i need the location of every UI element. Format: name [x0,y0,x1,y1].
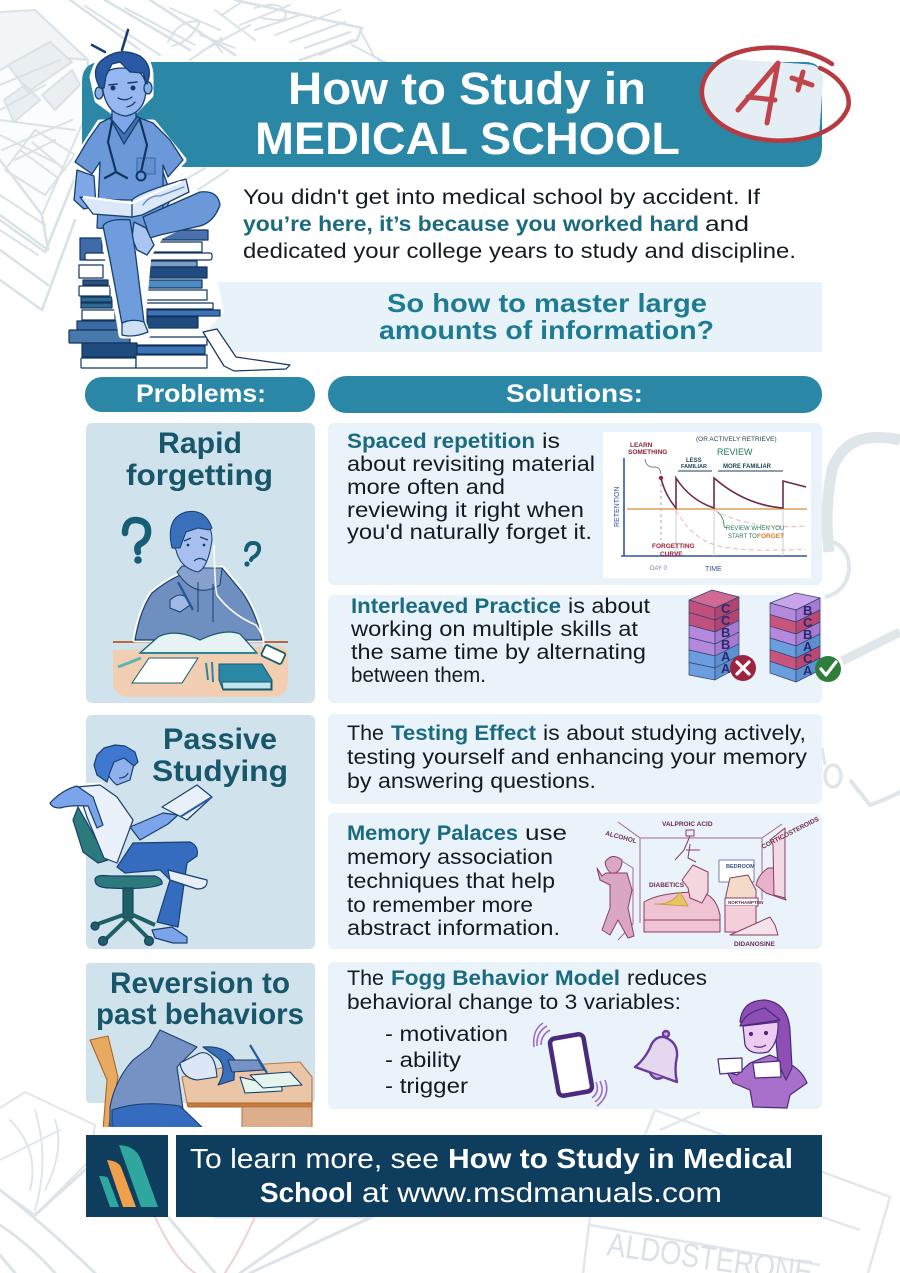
panel: interleaved practice: working on multiple skills at [350,618,638,641]
icon: bell [635,1031,677,1082]
panel: interleaved practice: between them. [351,664,486,687]
panel: spaced repetition: reviewing it right when [347,499,584,522]
panel: passive studying: Studying [152,755,288,788]
icon: block stack, blocked practice (wrong): B [721,625,730,640]
icon: block stack, blocked practice (wrong): A [721,661,731,676]
panel: reversion to past behaviors: Reversion to [110,967,290,1000]
intro text: and [705,213,749,236]
icon: block stack, blocked practice (wrong): A [721,649,731,664]
icon: correct mark [815,656,841,682]
chart: forgetting curve and review schedule: RETENTION [614,487,621,527]
list: three variables: - trigger [385,1075,468,1098]
panel: testing effect: Testing Effect [391,722,536,745]
title banner: MEDICAL SCHOOL [255,113,680,164]
icon: block stack, interleaved practice (right) [770,593,820,682]
footer call to action: at www.msdmanuals.com [362,1177,722,1208]
illustration: girl with flash cards [718,1000,807,1108]
illustration: memory palace bedroom: DIABETICS [649,882,685,889]
panel: reversion to past behaviors: past behaviors [96,998,304,1031]
icon: wrong mark [730,655,756,681]
chart: forgetting curve and review schedule: DAY 0 [650,566,667,572]
chart: forgetting curve and review schedule: LESS [686,458,702,464]
background sketch: Aldosterone flash card [583,1110,890,1273]
scrub top [75,118,183,232]
panel: interleaved practice [328,590,841,703]
panel: interleaved practice: Interleaved Practice [351,595,561,618]
illustration: memory palace bedroom: ALCOHOL [604,830,637,845]
background sketch: open textbook top left [0,0,400,310]
chart: forgetting curve and review schedule: FORGETTING [652,543,695,550]
chart: forgetting curve and review schedule: CURVE [660,551,683,558]
chart: forgetting curve and review schedule: FORGET [757,533,784,540]
panel: passive studying [50,715,315,949]
section pills: Solutions: [506,380,643,408]
white sticker outline [75,50,222,335]
title banner: How to Study in [288,63,646,114]
icon: question marks [125,520,259,567]
chart: forgetting curve and review schedule: REVIEW WHEN YOU [726,526,784,532]
icon: block stack, interleaved practice (right): A [803,663,813,678]
chart: forgetting curve and review schedule: START TO [728,534,757,540]
illustration: relaxed student reading in chair [50,745,212,946]
intro text: dedicated your college years to study and discipline. [243,240,796,263]
list: three variables: - motivation [385,1023,508,1046]
panel: rapid forgetting: Rapid [158,427,242,460]
illustration: memory palace bedroom: BEDROOM [726,864,755,870]
crossed leg [143,192,220,238]
section pills: Problems: [136,380,266,408]
icon: block stack, blocked practice (wrong): C [721,613,731,628]
icon: block stack, interleaved practice (right): A [803,639,813,654]
icon: vibrating phone [534,1023,607,1106]
footer logo [86,1135,168,1217]
chart: forgetting curve and review schedule: TIME [705,566,722,573]
panel: spaced repetition: you'd naturally forget it. [347,521,592,544]
panel: spaced repetition: more often and [347,476,505,499]
list: three variables [385,1023,508,1098]
book stack [66,226,296,374]
loose open book [203,329,290,371]
intro text: you’re here, it’s because you worked hard [243,213,699,236]
chart: forgetting curve and review schedule: LEARN [630,442,653,449]
footer call to action [176,1135,822,1217]
panel: memory palaces [328,813,822,949]
illustration: memory palace bedroom: DIDANOSINE [734,941,775,948]
chart: forgetting curve and review schedule: (OR ACTIVELY RETRIEVE) [696,436,777,443]
textbook [80,179,189,217]
panel: testing effect: The [347,722,384,745]
icon: block stack, blocked practice (wrong): C [721,601,731,616]
intro text: You didn't get into medical school by accident. If [243,186,760,209]
panel: memory palaces: memory association [347,846,553,869]
neck and face [112,105,136,134]
panel: interleaved practice: the same time by alternating [351,641,646,664]
panel: memory palaces: to remember more [347,894,533,917]
panel: rapid forgetting [86,423,315,703]
panel: memory palaces: techniques that help [347,870,555,893]
section pills [85,376,822,413]
list: three variables: - ability [385,1049,462,1072]
illustration: memory palace bedroom: CORTICOSTEROIDS [761,816,821,851]
chart: forgetting curve and review schedule: SOMETHING [628,449,667,456]
panel: interleaved practice: is about [568,595,650,618]
chart: forgetting curve and review schedule: MORE FAMILIAR [723,464,772,470]
panel: rapid forgetting: forgetting [126,459,273,492]
hanging leg [103,220,144,324]
question band: amounts of information? [379,315,714,345]
footer call to action: School [260,1177,353,1208]
footer call to action: To learn more, see [190,1143,439,1174]
panel: memory palaces: Memory Palaces [347,822,518,845]
panel: fogg behavior model: behavioral change to 3 variables: [347,991,681,1014]
panel: testing effect: is about studying actively, [543,722,806,745]
panel: memory palaces: abstract information. [347,917,560,940]
question band: So how to master large [387,288,707,318]
stethoscope [105,120,147,178]
panel: spaced repetition: Spaced repetition [347,430,535,453]
illustration: memory palace bedroom [597,816,821,948]
footer call to action: How to Study in Medical [448,1143,793,1174]
arms [74,170,96,209]
illustration: memory palace bedroom: VALPROIC ACID [662,821,713,828]
title banner [82,62,822,167]
chart: forgetting curve and review schedule [603,432,811,578]
panel: spaced repetition [328,423,822,585]
icon: block stack, interleaved practice (right): B [803,603,812,618]
character: medical student [74,30,222,336]
illustration: memory palace bedroom: NORTHAMPTON [728,900,763,905]
illustration: student asleep at desk [90,1030,312,1130]
panel: fogg behavior model: Fogg Behavior Model [391,967,620,990]
panel: testing effect: by answering questions. [347,770,596,793]
panel: memory palaces: use [525,822,567,845]
icon: block stack, blocked practice (wrong): B [721,637,730,652]
icon: block stack, interleaved practice (right): C [803,651,813,666]
panel: fogg behavior model [328,962,822,1109]
chart: forgetting curve and review schedule: REVIEW [717,447,753,457]
A+ grade stamp [698,41,852,147]
icon: block stack, interleaved practice (right): B [803,627,812,642]
intro text [243,186,796,263]
panel: passive studying: Passive [163,723,277,756]
panel: spaced repetition: is [542,430,560,453]
panel: spaced repetition: about revisiting material [347,453,595,476]
background sketch: open textbook bottom left [0,1092,372,1273]
question band [210,282,822,352]
background sketch: headphones right [822,437,900,805]
illustration: confused student at desk [113,511,288,697]
panel: testing effect [328,714,822,804]
panel: fogg behavior model: reduces [627,967,707,990]
panel: fogg behavior model: The [347,967,384,990]
chart: forgetting curve and review schedule: FAMILIAR [681,464,707,470]
icon: block stack, interleaved practice (right): C [803,615,813,630]
panel: reversion to past behaviors [86,963,315,1130]
icon: block stack, blocked practice (wrong) [689,590,739,680]
panel: testing effect: testing yourself and enhancing your memory [347,746,808,769]
